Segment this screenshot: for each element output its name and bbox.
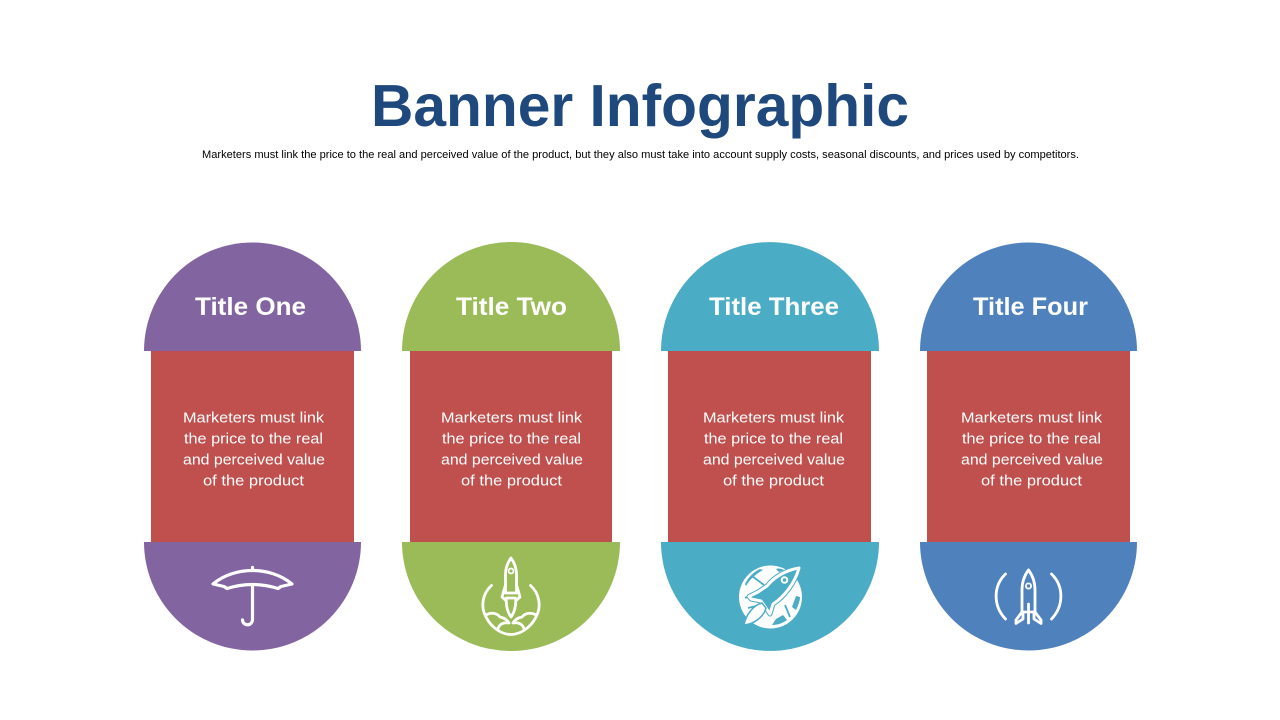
top cap: teal — [661, 242, 879, 351]
icon: umbrella — [213, 568, 292, 625]
panel: title three — [661, 242, 879, 651]
body text: and perceived value — [441, 452, 583, 468]
heading: title three: Title Three — [709, 293, 839, 321]
body text: of the product — [981, 472, 1083, 490]
body text: Marketers must link — [183, 410, 325, 426]
body text: the price to the real — [704, 430, 843, 448]
top cap: purple — [144, 242, 361, 351]
heading: title two: Title Two — [456, 293, 567, 321]
icon: rocket with brackets — [996, 570, 1061, 624]
top cap: green — [402, 242, 620, 351]
bottom cap: teal — [661, 542, 879, 651]
body text — [441, 410, 583, 490]
body text — [961, 410, 1103, 490]
heading: title one: Title One — [195, 293, 306, 321]
title: Banner Infographic — [371, 73, 909, 139]
bottom cap: purple — [144, 542, 361, 650]
body text: and perceived value — [183, 452, 325, 468]
body text — [703, 410, 845, 490]
body text: and perceived value — [961, 452, 1103, 468]
body text: of the product — [723, 472, 825, 490]
body block: red — [151, 351, 354, 542]
body text: Marketers must link — [441, 410, 583, 426]
icon: rocket launch — [483, 558, 539, 634]
body text — [183, 410, 325, 490]
body text: the price to the real — [962, 430, 1101, 448]
body text: Marketers must link — [961, 410, 1103, 426]
panel: title one — [144, 242, 361, 650]
heading: title four: Title Four — [973, 293, 1088, 321]
body text: the price to the real — [184, 430, 323, 448]
body text: the price to the real — [442, 430, 581, 448]
top cap: blue — [920, 242, 1137, 351]
body block: red — [668, 351, 871, 542]
subtitle: Marketers must link the price to the real and perceived value of the product, but they also must take into account supply costs, seasonal discounts, and prices used by competitors. — [202, 149, 1079, 161]
panel: title two — [402, 242, 620, 651]
body text: and perceived value — [703, 452, 845, 468]
bottom cap: blue — [920, 542, 1137, 650]
body text: of the product — [203, 472, 305, 490]
panel: title four — [920, 242, 1137, 650]
icon: globe and rocket — [739, 566, 802, 628]
body text: Marketers must link — [703, 410, 845, 426]
bottom cap: green — [402, 542, 620, 651]
body block: red — [410, 351, 612, 542]
body block: red — [927, 351, 1130, 542]
body text: of the product — [461, 472, 563, 490]
